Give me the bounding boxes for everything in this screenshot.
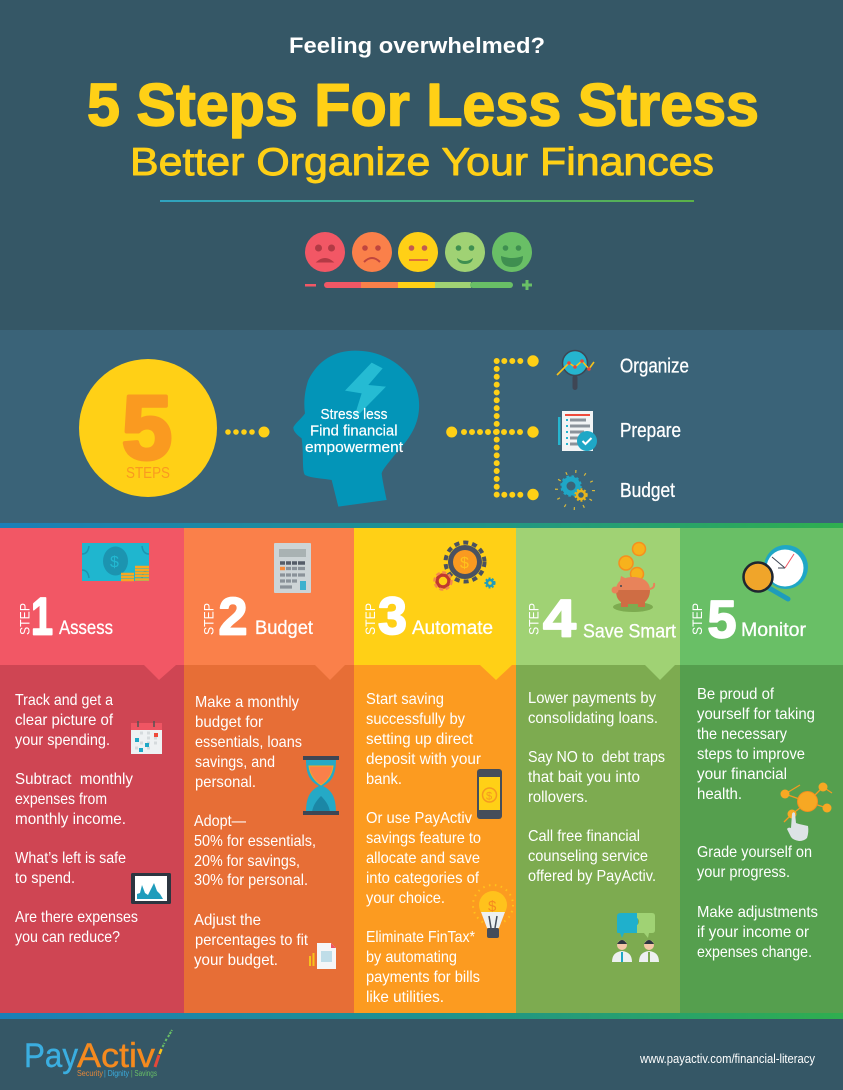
logo <box>24 1030 172 1078</box>
icon: checklist <box>558 411 597 451</box>
step heading: Assess <box>59 618 113 639</box>
face: happy <box>445 232 485 272</box>
step heading: Budget <box>255 618 314 639</box>
body text: payments for bills <box>366 969 480 986</box>
body text: allocate and save <box>366 850 480 867</box>
icon: people and puzzle <box>612 913 659 962</box>
header <box>87 33 759 202</box>
body text: 30% for personal. <box>194 872 308 889</box>
panel: step 3 <box>354 528 516 1013</box>
body text: successfully by <box>366 711 465 728</box>
body text: your budget. <box>194 952 278 969</box>
logo: | Savings <box>131 1069 157 1078</box>
panel: step 1 <box>0 528 184 1013</box>
body text: Be proud of <box>697 686 775 703</box>
panel: step 5 <box>680 528 843 1013</box>
label: budget: Budget <box>620 479 675 502</box>
step heading: 2 <box>218 588 248 646</box>
head with text: Stress less <box>320 406 388 423</box>
body text <box>15 692 138 946</box>
head with text <box>293 351 419 507</box>
step heading: Monitor <box>741 620 807 641</box>
body text: Lower payments by <box>528 690 656 707</box>
step heading: STEP <box>18 603 32 635</box>
body text: What’s left is safe <box>15 850 126 867</box>
footer strip <box>0 1013 843 1019</box>
icon: gears with dollar <box>434 542 495 590</box>
body text: expenses change. <box>697 944 812 961</box>
body text: your progress. <box>697 864 790 881</box>
icon: coin network and hand <box>780 782 832 841</box>
body text: your spending. <box>15 732 110 749</box>
body text: savings, and <box>195 754 275 771</box>
connector dots <box>225 426 270 438</box>
body text: Say NO to debt traps <box>528 749 665 766</box>
icon: calculator <box>274 543 311 593</box>
step heading: STEP <box>526 603 542 635</box>
body text: offered by PayActiv. <box>528 868 656 885</box>
body text <box>528 690 665 885</box>
body text: 20% for savings, <box>194 853 300 870</box>
logo: Pay <box>24 1037 78 1075</box>
icon: banknote: $ <box>110 554 119 571</box>
panel: step 2 <box>184 528 354 1013</box>
body text <box>366 691 482 1006</box>
scale bar <box>305 280 532 290</box>
body text: the necessary <box>697 726 787 743</box>
body text: savings feature to <box>366 830 481 847</box>
step heading: STEP <box>202 603 216 635</box>
stress scale <box>305 232 532 290</box>
body text: monthly income. <box>15 811 126 828</box>
body text: Eliminate FinTax* <box>366 929 475 946</box>
face: neutral <box>398 232 438 272</box>
body text <box>194 694 316 969</box>
title: 5 Steps For Less Stress <box>87 72 759 138</box>
icon: phone <box>477 769 502 819</box>
icon: clock and magnifier <box>744 545 808 599</box>
step heading: Automate <box>412 618 493 639</box>
icon: piggy bank <box>612 542 654 612</box>
subtitle: Better Organize Your Finances <box>130 141 714 184</box>
step heading: Save Smart <box>583 622 677 642</box>
step heading <box>363 587 493 646</box>
body text: consolidating loans. <box>528 710 658 727</box>
logo: Activ <box>77 1037 155 1075</box>
body text: your financial <box>697 766 787 783</box>
label: organize: Organize <box>620 354 689 378</box>
body text: Or use PayActiv <box>366 810 472 827</box>
body text: Adopt— <box>194 813 246 830</box>
step heading: STEP <box>690 603 705 635</box>
icon: light bulb <box>473 885 513 938</box>
icon: light bulb: $ <box>488 898 497 915</box>
step heading: 5 <box>708 590 736 650</box>
body text: Grade yourself on <box>697 844 812 861</box>
badge: 5 steps: 5 <box>122 378 172 478</box>
body text: by automating <box>366 949 457 966</box>
panel: overview band <box>0 330 843 528</box>
body text: budget for <box>195 714 264 731</box>
body text: 50% for essentials, <box>194 833 316 850</box>
body text: bank. <box>366 771 402 788</box>
label: prepare: Prepare <box>620 419 681 442</box>
body text: to spend. <box>15 870 75 887</box>
body text: steps to improve <box>697 746 805 763</box>
icon: phone: $ <box>486 790 492 802</box>
body text: Adjust the <box>194 912 261 929</box>
body text: you can reduce? <box>15 929 120 946</box>
face: very stressed <box>305 232 345 272</box>
icon: gears with dollar: $ <box>460 555 469 572</box>
body text: Call free financial <box>528 828 640 845</box>
body text: into categories of <box>366 870 480 887</box>
website url: www.payactiv.com/financial-literacy <box>639 1052 816 1066</box>
step heading <box>18 588 113 646</box>
body text: if your income or <box>697 924 810 941</box>
panel: step 4 <box>516 528 680 1013</box>
icon: gears <box>556 472 594 508</box>
body text: percentages to fit <box>195 932 309 949</box>
logo: Security <box>77 1069 103 1078</box>
step heading: 3 <box>378 587 407 646</box>
badge: 5 steps <box>79 359 217 497</box>
body text <box>697 686 818 961</box>
icon: hourglass <box>303 756 339 815</box>
face: stressed <box>352 232 392 272</box>
body text: your choice. <box>366 890 445 907</box>
body text: yourself for taking <box>697 706 815 723</box>
body text: Track and get a <box>15 692 113 709</box>
body text: health. <box>697 786 742 803</box>
body text: Make adjustments <box>697 904 818 921</box>
body text: rollovers. <box>528 789 588 806</box>
body text: Are there expenses <box>15 909 138 926</box>
body text: Make a monthly <box>195 694 299 711</box>
logo: | Dignity <box>104 1069 129 1078</box>
body text: essentials, loans <box>195 734 302 751</box>
badge: 5 steps: STEPS <box>126 465 170 482</box>
kicker: Feeling overwhelmed? <box>289 33 545 58</box>
body text: Start saving <box>366 691 444 708</box>
head with text: Find financial <box>310 422 398 440</box>
icon: banknote <box>82 543 149 581</box>
step heading <box>526 590 677 648</box>
step heading: 4 <box>543 590 577 648</box>
body text: expenses from <box>15 791 107 808</box>
body text: Subtract monthly <box>15 771 133 788</box>
step heading: STEP <box>363 603 378 635</box>
face: very happy <box>492 232 532 272</box>
body text: like utilities. <box>366 989 444 1006</box>
body text: clear picture of <box>15 712 114 729</box>
icon: report <box>310 943 336 969</box>
head with text: empowerment <box>305 439 404 456</box>
body text: that bait you into <box>528 769 640 786</box>
icon: magnifier chart <box>557 350 594 390</box>
body text: deposit with your <box>366 751 482 768</box>
step heading <box>202 588 314 646</box>
icon: tablet chart <box>131 873 171 904</box>
body text: personal. <box>195 774 256 791</box>
branching dots <box>446 355 539 500</box>
step heading <box>690 590 807 650</box>
body text: counseling service <box>528 848 648 865</box>
icon: calendar <box>131 721 162 754</box>
step heading: 1 <box>31 588 53 646</box>
body text: setting up direct <box>366 731 474 748</box>
